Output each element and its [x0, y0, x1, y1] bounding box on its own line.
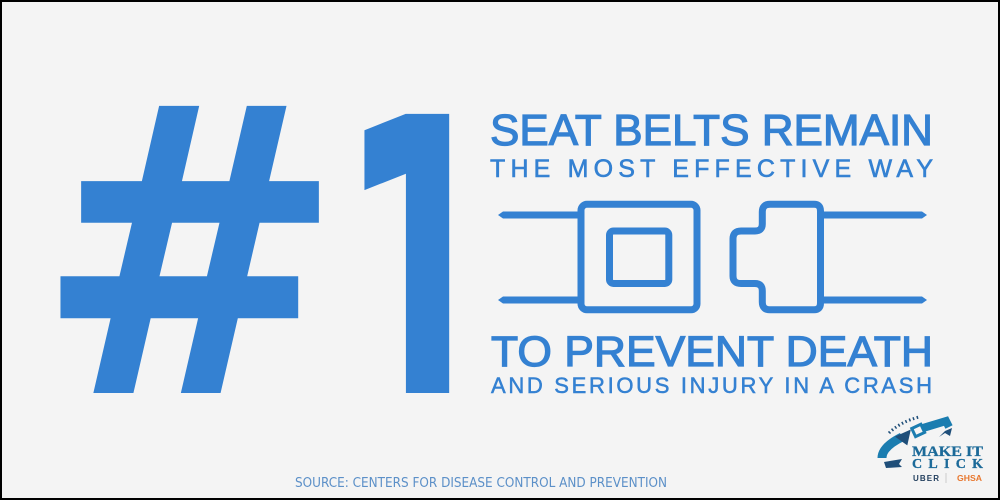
right belt straps [824, 212, 927, 304]
left belt straps [498, 212, 578, 304]
icon: unbuckled seat belt [498, 204, 927, 310]
hash sign: # [36, 21, 344, 488]
buckle with slot [581, 204, 697, 310]
logo: make it click [882, 417, 983, 483]
logo wordmark: make it: MAKE IT [912, 444, 983, 460]
buckle tongue [733, 204, 820, 310]
headline: to prevent death: TO PREVENT DEATH [491, 328, 933, 376]
logo partner: uber: UBER [913, 474, 939, 483]
big number heading: #1 [36, 21, 457, 488]
logo wordmark: click: CLICK [912, 457, 983, 472]
subheading: the most effective way: THE MOST EFFECTIVE WAY [490, 155, 933, 183]
logo partner: ghsa: GHSA [957, 473, 982, 483]
logo belt graphic [882, 417, 952, 468]
subheading: and serious injury in a crash: AND SERIOUS INJURY IN A CRASH [491, 373, 932, 398]
source line: SOURCE: CENTERS FOR DISEASE CONTROL AND PREVENTION [295, 476, 667, 491]
headline: seat belts remain: SEAT BELTS REMAIN [490, 106, 933, 155]
